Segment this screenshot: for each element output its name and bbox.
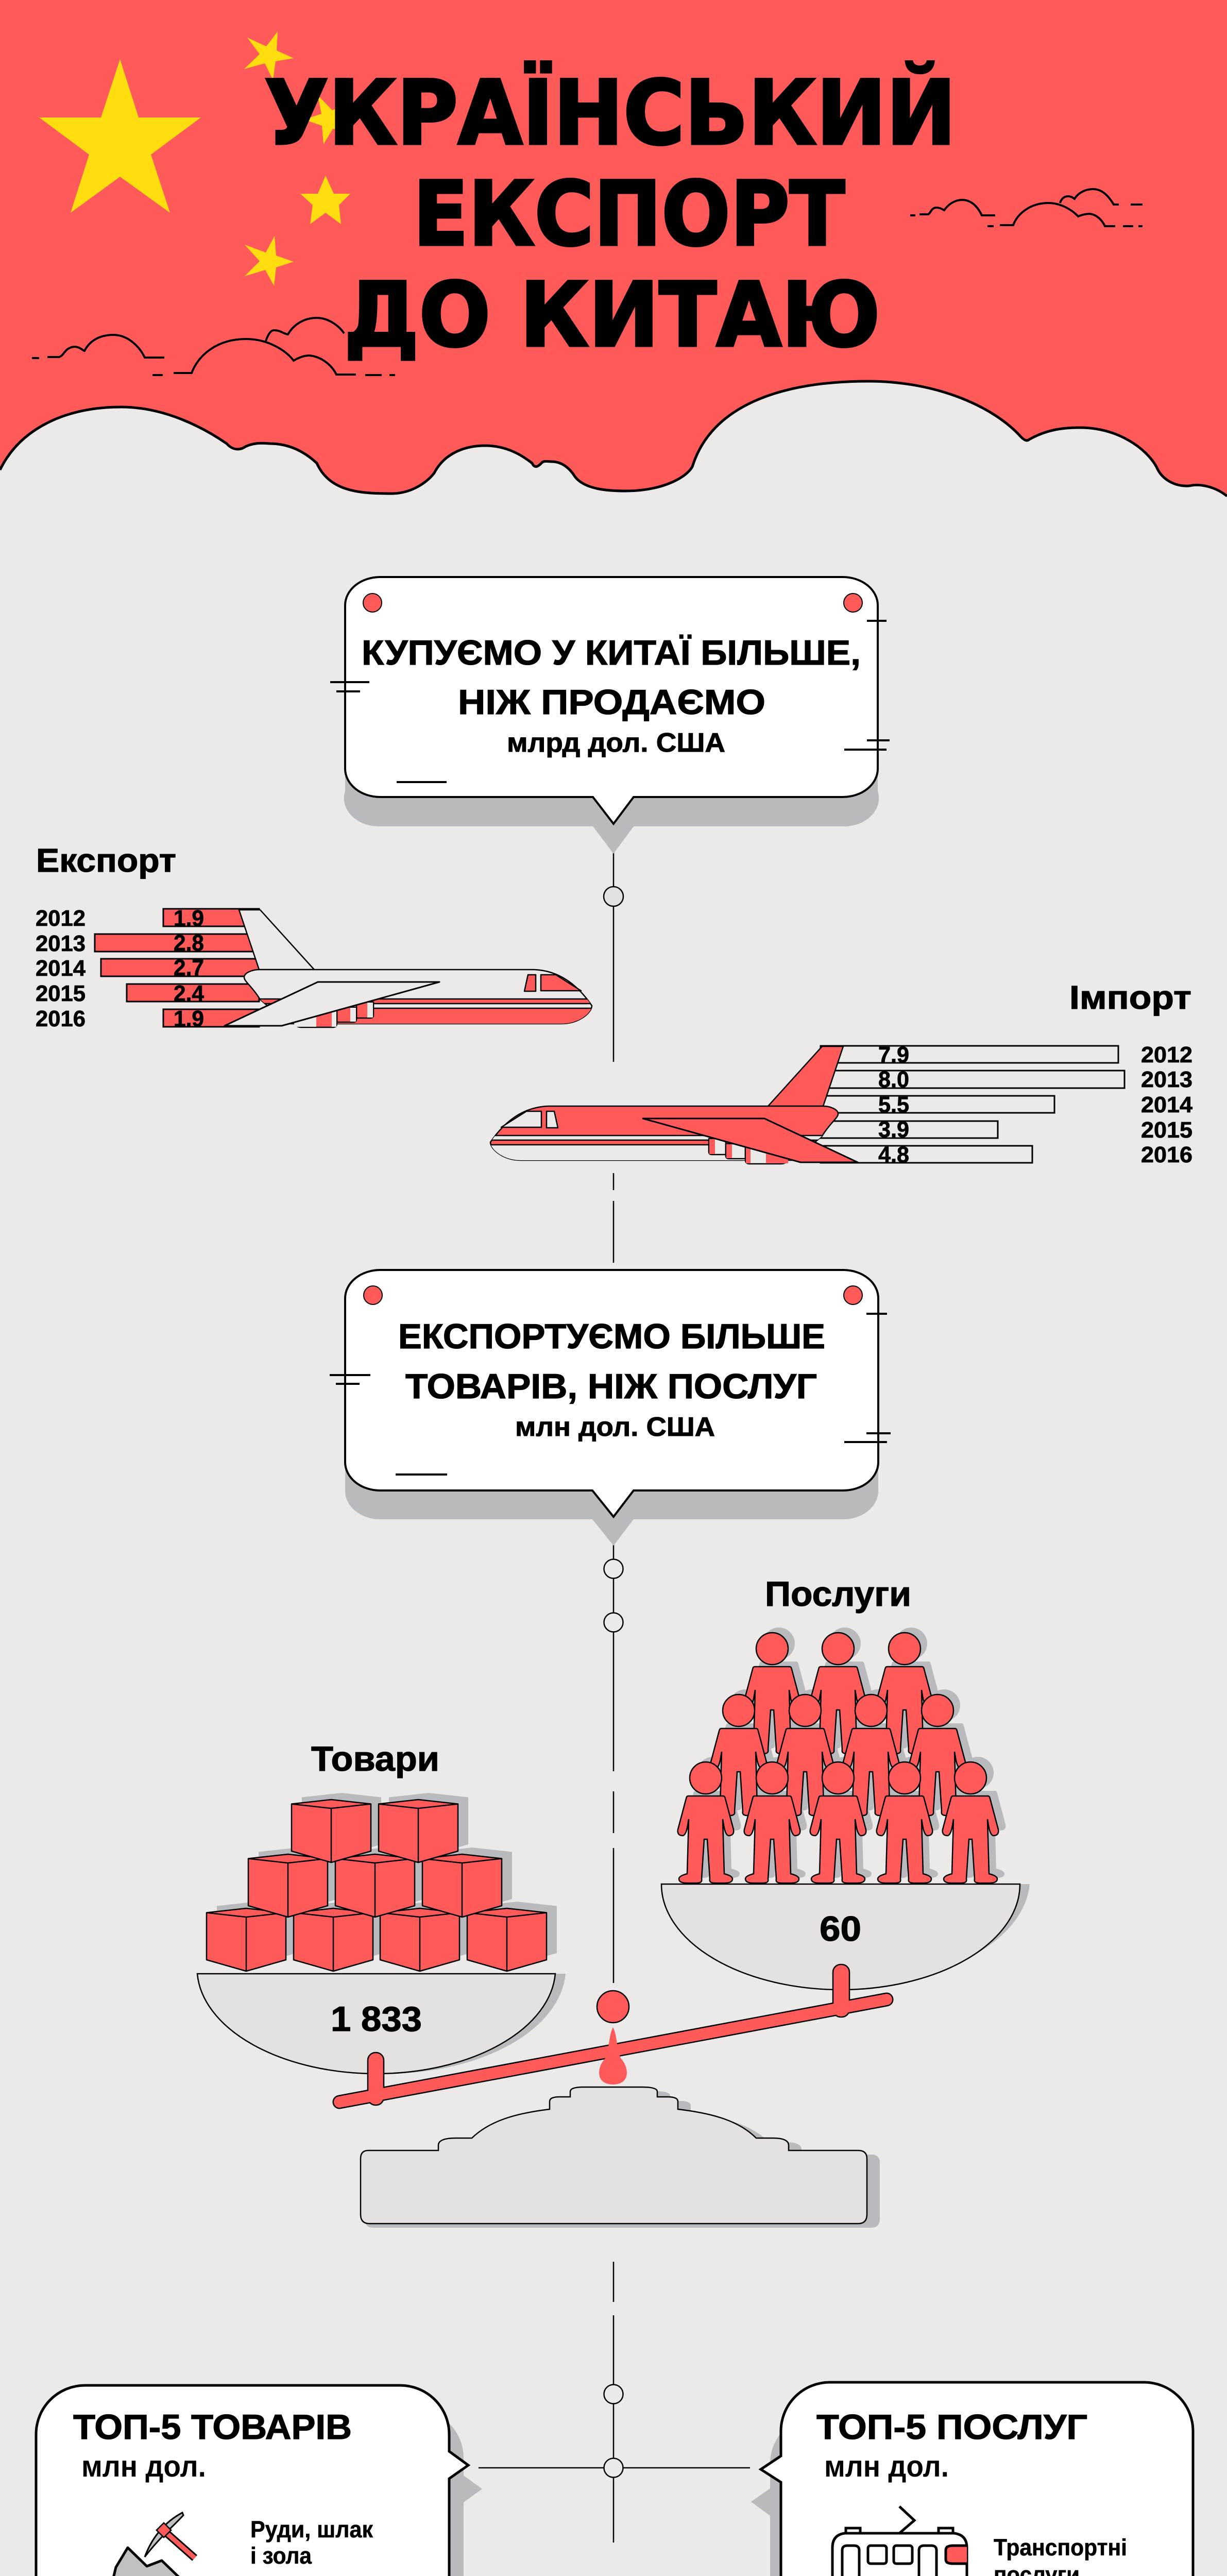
bar chart: export: 1.9 [174, 906, 204, 931]
title: ЕКСПОРТ [413, 162, 845, 266]
bar chart: import: 8.0 [878, 1067, 909, 1092]
heading: goods: Товари [311, 1739, 439, 1778]
scale: left bowl [197, 1974, 566, 2074]
bar chart: export: 2015 [36, 981, 86, 1006]
bubble 1: buy more than sell: млрд дол. США [507, 728, 725, 758]
bar chart: export: 2012 [36, 906, 86, 931]
bar chart: export [36, 906, 259, 1031]
header red band with cloud edge [0, 0, 1227, 496]
title [264, 61, 956, 367]
item: ores [110, 2513, 373, 2576]
bar chart: import: 2013 [1141, 1067, 1192, 1092]
bar chart: export: 2.7 [174, 955, 204, 980]
decorative small clouds [32, 189, 1143, 375]
icon: import plane [485, 1046, 858, 1164]
title: ДО КИТАЮ [344, 263, 880, 367]
item: ores: Руди, шлак [250, 2516, 373, 2543]
title: УКРАЇНСЬКИЙ [264, 61, 956, 165]
scale: right bowl [661, 1884, 1030, 1990]
scale: left bowl: 1 833 [331, 1999, 422, 2039]
bubble 2: export goods more than services: ТОВАРІВ, НІЖ ПОСЛУГ [405, 1367, 817, 1406]
heading: services: Послуги [765, 1574, 911, 1614]
item: transport [832, 2506, 1127, 2576]
bar chart: import [821, 1042, 1193, 1167]
panel: top-5 services [751, 2382, 1193, 2576]
units: млн дол. [824, 2450, 949, 2483]
bar chart: import: 3.9 [878, 1117, 909, 1142]
scale: right bowl: 60 [820, 1909, 861, 1948]
bubble 1: buy more than sell [330, 577, 890, 854]
heading: import: Імпорт [1069, 979, 1191, 1016]
units: млн дол. [81, 2450, 206, 2483]
icon: flag stars [39, 31, 353, 286]
item: ores: і зола [250, 2543, 312, 2569]
bar chart: export: 2013 [36, 931, 86, 956]
central timeline [479, 824, 750, 2543]
scale: beam [339, 1964, 887, 2105]
bar chart: import: 2014 [1141, 1092, 1193, 1117]
bubble 2: export goods more than services: млн дол. США [515, 1412, 715, 1442]
bar chart: import: 5.5 [878, 1092, 909, 1117]
bar chart: export: 2.4 [174, 981, 204, 1006]
item: transport: Транспортні [994, 2534, 1127, 2561]
bar chart: import: 2012 [1141, 1042, 1192, 1067]
bubble 2: export goods more than services [330, 1270, 891, 1546]
bubble 1: buy more than sell: КУПУЄМО У КИТАЇ БІЛЬШЕ, [362, 633, 861, 672]
heading: ТОП-5 ПОСЛУГ [816, 2408, 1087, 2447]
timeline node [604, 887, 623, 906]
icon: boxes on scale [207, 1793, 557, 1971]
heading: ТОП-5 ТОВАРІВ [73, 2408, 352, 2447]
bar chart: import: 2016 [1141, 1142, 1192, 1167]
heading: export: Експорт [36, 842, 176, 879]
bar chart: import: 2015 [1141, 1117, 1192, 1143]
scale: base [361, 2087, 880, 2228]
bubble 1: buy more than sell: НІЖ ПРОДАЄМО [458, 683, 765, 722]
timeline nodes [604, 1559, 623, 2477]
bar chart: export: 2016 [36, 1006, 86, 1031]
bar chart: export: 2.8 [174, 930, 204, 956]
bar chart: import: 7.9 [878, 1042, 909, 1067]
bubble 2: export goods more than services: ЕКСПОРТУЄМО БІЛЬШЕ [398, 1317, 825, 1356]
bar chart: export: 1.9 [174, 1006, 204, 1031]
icon: export plane [225, 910, 598, 1027]
panel: top-5 goods [36, 2385, 482, 2576]
bar chart: export: 2014 [36, 956, 86, 981]
bar chart: import: 4.8 [878, 1142, 909, 1167]
icon: people on scale [678, 1628, 1006, 1883]
